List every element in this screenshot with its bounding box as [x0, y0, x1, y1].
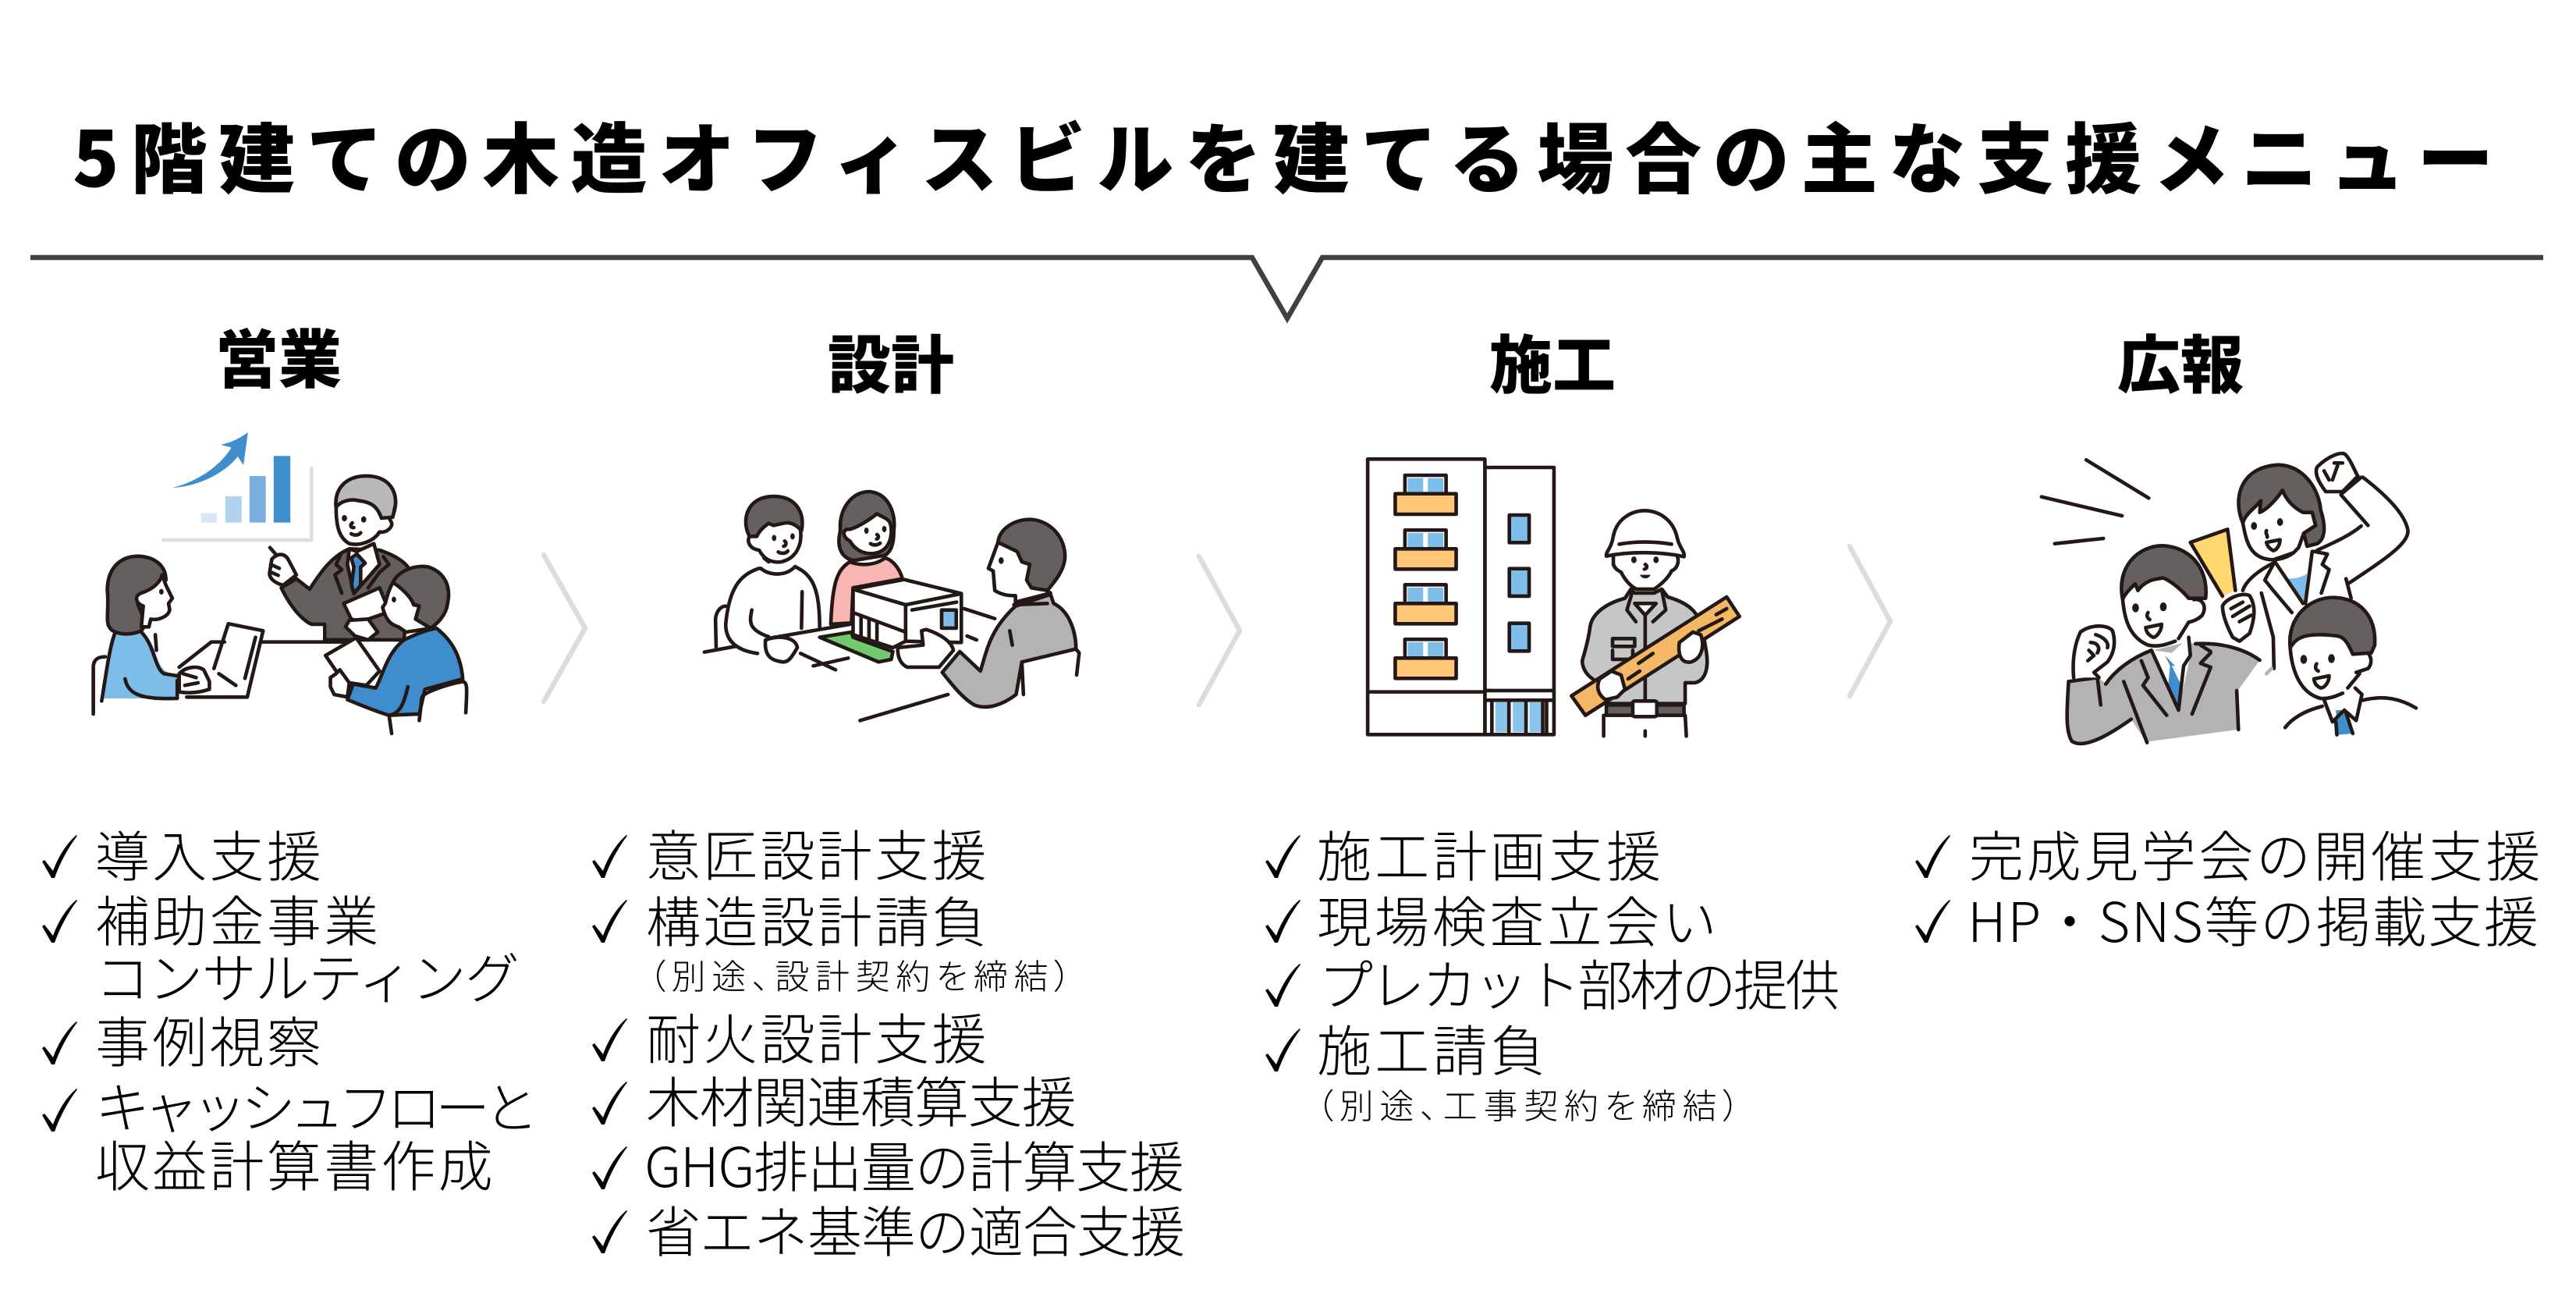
icon: check [1915, 835, 1950, 878]
item: 省エネ基準の適合支援 [646, 1189, 1184, 1268]
arrow: 営業 to 設計 [544, 555, 585, 702]
icon: check [592, 1082, 627, 1125]
figure: woman at laptop [94, 556, 346, 714]
figure: man client [704, 496, 850, 670]
icon: check [42, 1089, 77, 1132]
icon: check [592, 1146, 627, 1189]
item: GHG排出量の計算支援 [644, 1125, 1183, 1203]
building model [820, 580, 961, 662]
arrow: 設計 to 施工 [1199, 556, 1240, 705]
note: （別途、設計契約を締結） [648, 949, 1077, 999]
illustration: building and construction worker [1368, 459, 1740, 736]
figure: man holding documents [325, 567, 467, 734]
icon: check [42, 835, 77, 878]
panel: 営業 [42, 310, 533, 1203]
figure: worker with lumber [1571, 510, 1740, 736]
illustration: cheering team [2042, 453, 2416, 745]
icon: check [592, 1210, 627, 1253]
item: 施工請負 [1317, 1008, 1549, 1087]
figure: woman client [831, 492, 903, 624]
item: 耐火設計支援 [646, 997, 989, 1075]
item continued: 収益計算書作成 [95, 1124, 495, 1203]
item: 構造設計請負 [646, 879, 989, 958]
note: （別途、工事契約を締結） [1316, 1078, 1746, 1128]
figure: young man [2285, 598, 2416, 735]
icon: check [42, 1022, 77, 1064]
panel: 施工 [1265, 315, 1837, 1128]
icon: check [1265, 1029, 1300, 1071]
item: 意匠設計支援 [646, 813, 989, 892]
checklist: 営業 [42, 814, 533, 1203]
panel: 広報 [1915, 315, 2543, 958]
title: 5階建ての木造オフィスビルを建てる場合の主な支援メニュー [73, 98, 2505, 209]
emphasis lines [2042, 460, 2148, 544]
icon: check [1265, 835, 1300, 878]
heading: 設計: 設計 [828, 315, 954, 407]
item continued: コンサルティング [95, 936, 518, 1014]
heading: 広報: 広報 [2117, 315, 2244, 407]
heading: 営業: 営業 [215, 310, 342, 401]
item: 事例視察 [95, 1000, 324, 1078]
figure: man in gray suit [2067, 545, 2260, 745]
illustration: sales meeting [94, 432, 467, 734]
illustration: design consultation with building model [704, 492, 1079, 720]
figure: architect [860, 520, 1079, 720]
item: 木材関連積算支援 [646, 1060, 1075, 1139]
icon: check [592, 900, 627, 943]
icon: check [1265, 900, 1300, 943]
item: HP・SNS等の掲載支援 [1967, 879, 2540, 958]
building [1368, 459, 1554, 734]
icon: check [1265, 964, 1300, 1007]
panel: 設計 [592, 315, 1184, 1268]
item: 導入支援 [95, 814, 324, 893]
item: 施工計画支援 [1317, 814, 1664, 893]
arrow: 施工 to 広報 [1850, 546, 1890, 696]
divider with downward notch [30, 258, 2543, 318]
figure: presenter [270, 476, 408, 640]
icon: check [1915, 900, 1950, 943]
item: 完成見学会の開催支援 [1969, 814, 2543, 893]
item: キャッシュフローと [95, 1065, 533, 1144]
item: 現場検査立会い [1317, 879, 1720, 958]
figure: woman cheering with megaphone [2191, 453, 2408, 673]
heading: 施工: 施工 [1489, 315, 1616, 407]
checklist: 設計 [592, 813, 1184, 1268]
icon: check [592, 1018, 627, 1061]
item: 補助金事業 [95, 879, 381, 958]
checklist: 広報 [1915, 814, 2543, 958]
checklist: 施工 [1265, 814, 1837, 1128]
icon: check [592, 835, 627, 878]
icon: check [42, 900, 77, 943]
chart: rising bars and arrow [163, 432, 311, 540]
item: プレカット部材の提供 [1318, 943, 1837, 1022]
